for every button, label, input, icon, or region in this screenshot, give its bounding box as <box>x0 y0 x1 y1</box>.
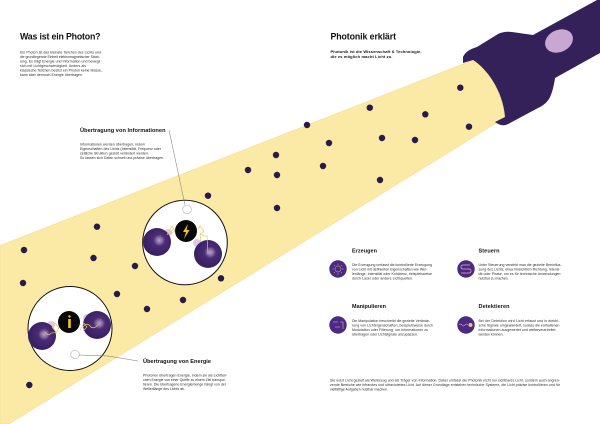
section: Erzeugen: durch Laser oder andere Lichtquellen. <box>352 276 413 280</box>
section: Detektieren: Bei der Detektion wird Licht erfasst und in elektri- <box>478 319 560 323</box>
magnifier: energy transfer <box>28 286 112 370</box>
section: Detektieren: Detektieren <box>478 304 510 310</box>
section: Detektieren: Informationen ausgewertet und weiterverarbeitet <box>478 328 556 332</box>
heading: Photonik erklärt: Photonik erklärt <box>330 32 396 42</box>
text: energy transfer: tieren. Die übertragene Energiemenge hängt von der <box>143 382 227 386</box>
text: energy transfer <box>143 374 228 391</box>
icon: manipulate <box>329 316 347 334</box>
section: Steuern <box>457 248 562 280</box>
callout marker <box>71 350 79 359</box>
photon left <box>28 321 56 350</box>
text: energy transfer: Wellenlänge des Lichts ab. <box>143 387 185 391</box>
text: information transfer: So lassen sich Daten schnell und präzise übertragen. <box>80 156 164 160</box>
callout marker <box>183 205 191 214</box>
photon right <box>83 311 111 339</box>
section: Steuern: nutzbar zu machen. <box>478 276 509 280</box>
section: Steuern: tät oder Phase, um es für technische Anwendungen <box>478 272 561 276</box>
text: energy transfer: chen Energie von einer Quelle zu einem Ziel transpor- <box>143 378 227 382</box>
text: summary: vielfältige Aufgaben nutzbar machen. <box>330 388 388 392</box>
section: Detektieren <box>457 304 560 336</box>
section: Detektieren: werden können. <box>478 332 504 336</box>
section: Erzeugen: Die Erzeugung umfasst die kontrollierte Erzeugung <box>352 263 432 267</box>
flashlight button <box>541 25 577 57</box>
photon particles <box>20 84 472 388</box>
text: summary: Sie nutzt Licht gezielt als Werkzeug und als Träger von Information. Dabei umfasst die Photonik nicht nur sichtbares Licht, sondern auch angren- <box>330 378 561 382</box>
heading: energy transfer: Übertragung von Energie <box>143 358 211 365</box>
light beam <box>0 60 504 424</box>
section: Manipulieren <box>329 304 433 336</box>
text: photon definition: lung. Es trägt Energie und Information und bewegt <box>20 60 100 64</box>
signal waves <box>167 226 208 254</box>
text: photon definition: klassische Teilchen besitzt ein Photon keine Masse, <box>20 68 102 72</box>
leader line information <box>169 130 185 205</box>
section: Erzeugen: von Licht mit definierten Eigenschaften wie Wel- <box>352 268 428 272</box>
section: Manipulieren: Die Manipulation beschreibt die gezielte Verände- <box>352 319 431 323</box>
section: Manipulieren: Modulation oder Filterung, um Informationen zu <box>352 328 428 332</box>
magnifier: information transfer <box>143 200 227 285</box>
section: Detektieren: sche Signale umgewandelt, sodass die enthaltenen <box>478 324 560 328</box>
text: information transfer: zeitliche Struktur) gezielt verändert werden. <box>80 152 149 156</box>
photon left <box>143 228 172 256</box>
flashlight <box>463 0 600 125</box>
text: photon definition: Ein Photon ist das kleinste Teilchen des Lichts und <box>20 50 101 54</box>
section: Steuern: Steuern <box>478 248 500 254</box>
text: energy transfer: Photonen übertragen Energie, indem sie als Lichtteil- <box>143 374 228 378</box>
text: information transfer: Eigenschaften des Lichts (Intensität, Frequenz oder <box>80 147 162 151</box>
info badge <box>58 311 80 333</box>
section: Steuern: sung des Lichts, etwa hinsichtlich Richtung, Intensi- <box>478 268 561 272</box>
leader line energy <box>79 355 138 361</box>
text: photon definition: sich mit Lichtgeschwindigkeit. Anders als <box>20 64 86 68</box>
text: information transfer: Informationen werden übertragen, indem <box>80 142 145 146</box>
text: summary <box>330 378 561 392</box>
photon right <box>193 239 222 268</box>
section: Manipulieren: übertragen oder Lichtsignale anzupassen. <box>352 332 418 336</box>
text: information transfer <box>80 142 164 160</box>
section: Erzeugen: lenlänge, Intensität oder Kohärenz, beispielsweise <box>352 272 432 276</box>
icon: detect <box>457 316 475 334</box>
section: Erzeugen: Erzeugen <box>352 248 378 254</box>
text: photon definition: kann aber dennoch Energie übertragen. <box>20 73 83 77</box>
lightning badge <box>175 220 197 242</box>
icon: control <box>457 260 475 278</box>
energy waves <box>45 323 98 335</box>
icon: sun <box>329 260 347 278</box>
text: summary: zende Bereiche wie infrarotes und ultraviolettes Licht. Auf dieser Grundlage entstehen technische Systeme, die Licht präzise kontrollieren und für <box>330 383 561 387</box>
heading: Was ist ein Photon: Was ist ein Photon? <box>20 32 100 42</box>
section: Manipulieren: Manipulieren <box>352 304 387 310</box>
text: photon definition: die grundlegende Einheit elektromagnetischer Strah- <box>20 55 101 59</box>
subtitle <box>330 49 422 59</box>
subtitle: die es möglich macht Licht zu. <box>330 54 392 59</box>
section: Steuern: Unter Steuerung versteht man die gezielte Beeinflus- <box>478 263 562 267</box>
subtitle: Photonik ist die Wissenschaft & Technologie, <box>330 49 422 54</box>
section: Manipulieren: rung von Lichteigenschaften, beispielsweise durch <box>352 324 433 328</box>
section: Erzeugen <box>329 248 432 280</box>
heading: information transfer: Übertragung von Informationen <box>80 127 166 134</box>
text: photon definition <box>20 50 102 77</box>
